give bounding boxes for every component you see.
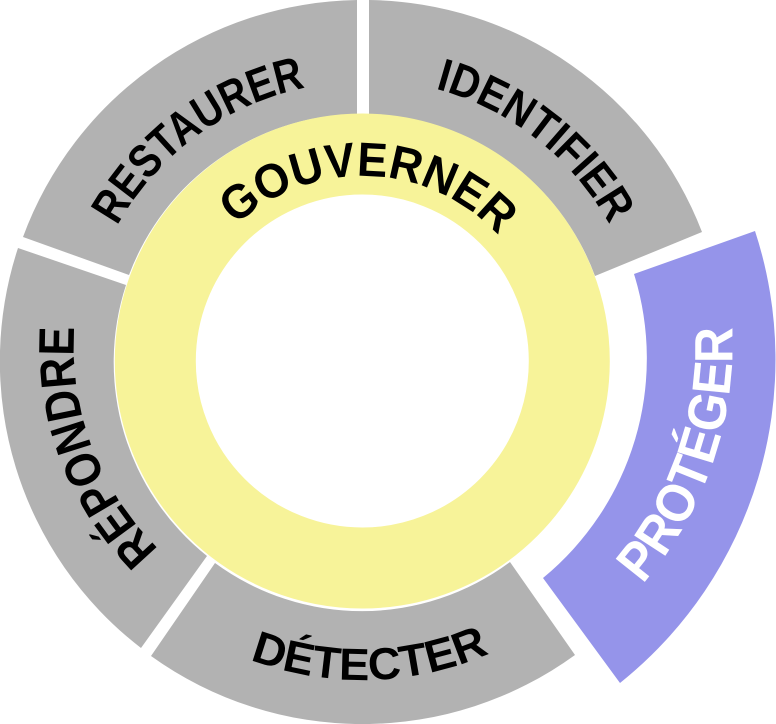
segment: répondre xyxy=(0,248,207,648)
segment: détecter xyxy=(151,562,575,724)
segment: restaurer xyxy=(23,0,357,275)
segment: protéger (highlighted) xyxy=(543,231,776,683)
segment: identifier: IDENTIFIER xyxy=(438,59,632,224)
segment: protéger (highlighted): PROTÉGER xyxy=(616,328,732,582)
segment: restaurer: RESTAURER xyxy=(90,58,304,224)
segment: répondre: RÉPONDRE xyxy=(39,328,156,570)
central ring: gouverner: GOUVERNER xyxy=(222,142,516,234)
segment: détecter: DÉTECTER xyxy=(252,628,489,680)
segment: identifier xyxy=(369,0,702,276)
